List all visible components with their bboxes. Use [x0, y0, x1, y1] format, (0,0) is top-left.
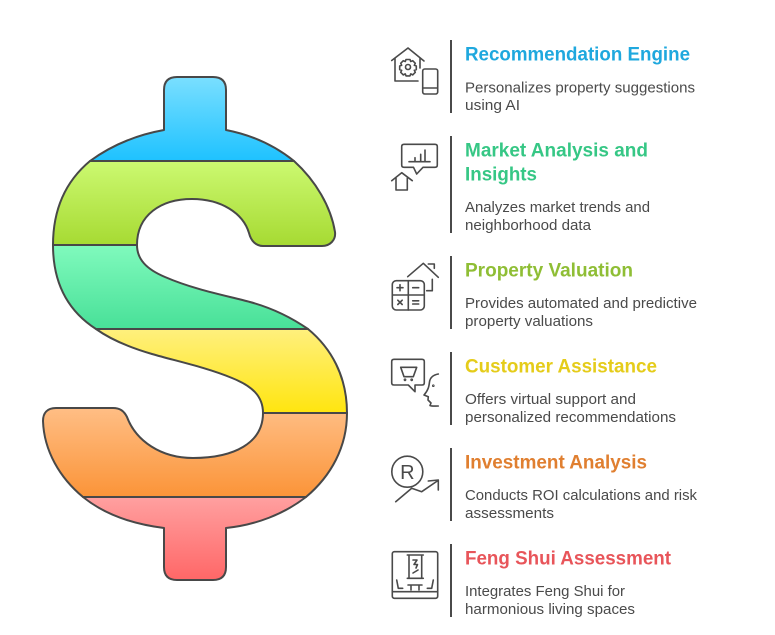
divider — [450, 40, 452, 113]
segment: feng shui (red) — [83, 497, 306, 580]
item: property valuation — [392, 256, 697, 330]
item: investment analysis — [392, 448, 697, 522]
icon: cart bubble with face — [392, 359, 438, 406]
item: investment analysis: assessments — [465, 505, 554, 522]
heading: Market Analysis and — [465, 140, 648, 162]
description: Offers virtual support and — [465, 391, 636, 408]
icon: chart bubble with house — [392, 144, 437, 190]
dollar sign chart — [43, 77, 347, 580]
item: customer assistance — [392, 352, 676, 426]
heading: Customer Assistance — [465, 356, 657, 378]
item: feng shui assessment: harmonious living spaces — [465, 601, 635, 618]
description: Personalizes property suggestions — [465, 79, 695, 96]
item: feng shui assessment — [392, 544, 671, 618]
heading: Recommendation Engine — [465, 44, 690, 66]
segment: investment analysis (orange) — [43, 408, 347, 497]
item: customer assistance: personalized recommendations — [465, 409, 676, 426]
segment: customer assistance (yellow) — [96, 329, 347, 413]
divider — [450, 136, 452, 233]
divider — [450, 256, 452, 329]
item: market analysis — [392, 136, 650, 234]
segment: property valuation (green) — [53, 245, 308, 329]
icon: calculator with house — [392, 263, 438, 310]
segment: recommendation engine (blue) — [90, 77, 294, 161]
icon: coin with growth arrow — [392, 456, 438, 502]
description: Conducts ROI calculations and risk — [465, 487, 697, 504]
heading: Feng Shui Assessment — [465, 548, 671, 570]
divider — [450, 544, 452, 617]
description: Provides automated and predictive — [465, 295, 697, 312]
item: market analysis: Insights — [465, 164, 537, 186]
segment: market analysis (lime) — [53, 161, 335, 246]
item: recommendation engine — [392, 40, 695, 114]
description: Analyzes market trends and — [465, 199, 650, 216]
divider — [450, 448, 452, 521]
icon: smart home with phone — [392, 48, 438, 94]
divider — [450, 352, 452, 425]
item: market analysis: neighborhood data — [465, 217, 592, 234]
heading: Investment Analysis — [465, 452, 647, 474]
icon: coin with growth arrow: R — [400, 462, 415, 484]
description: Integrates Feng Shui for — [465, 583, 625, 600]
item: property valuation: property valuations — [465, 313, 593, 330]
item: recommendation engine: using AI — [465, 97, 520, 114]
icon: room with mirror — [392, 552, 438, 598]
heading: Property Valuation — [465, 260, 633, 282]
